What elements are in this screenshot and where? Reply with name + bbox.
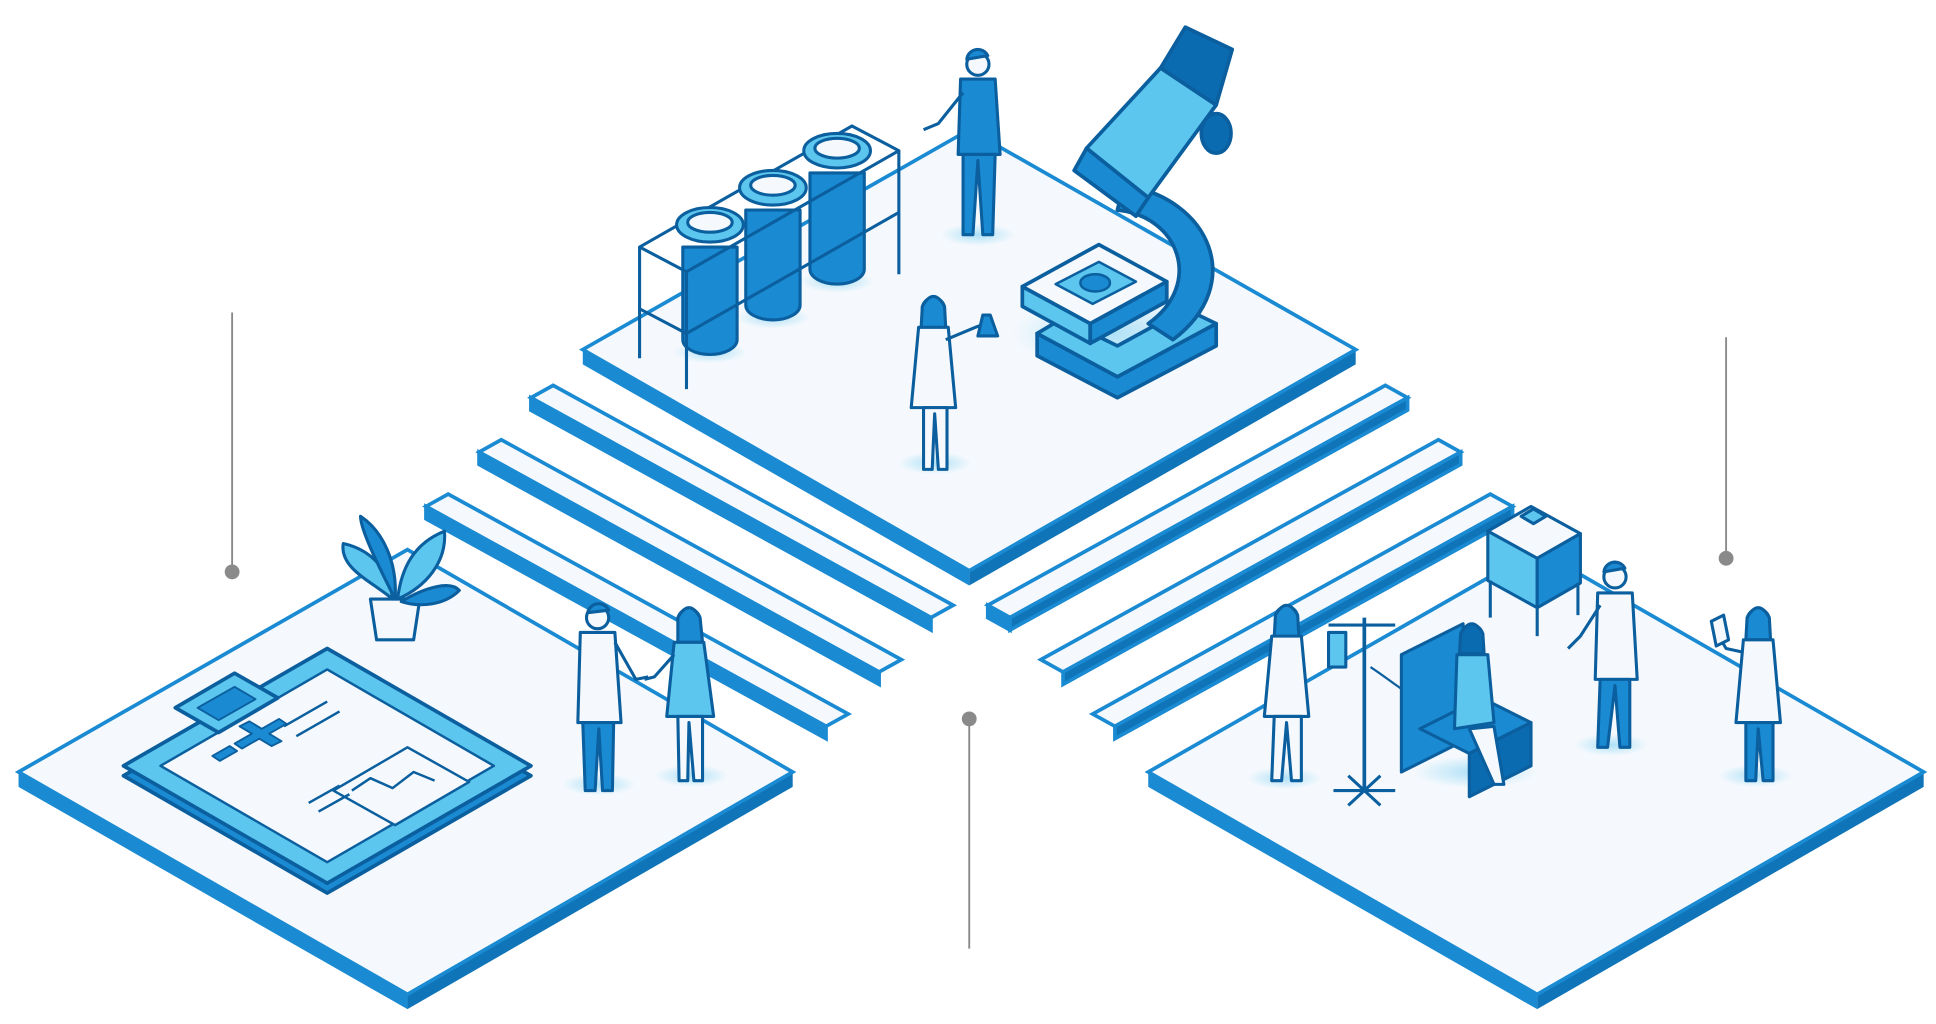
people: lab researcher standing bbox=[924, 49, 1015, 246]
icon: plant bbox=[343, 516, 459, 640]
stripes: left bars bbox=[426, 385, 953, 739]
icon: treatment chair with patient bbox=[1401, 624, 1537, 797]
platform: left (clinic) bbox=[19, 550, 793, 1009]
people: lab researcher with flask bbox=[898, 296, 998, 474]
people: doctor bbox=[1568, 562, 1648, 756]
people: handshake bbox=[562, 604, 728, 795]
platform: top (research) bbox=[583, 130, 1356, 585]
people: nurse with IV bbox=[1247, 605, 1457, 805]
icon: clipboard bbox=[123, 648, 531, 893]
icon: cart bbox=[1488, 506, 1580, 636]
people: nurse with tablet bbox=[1711, 608, 1793, 787]
icon: microscope bbox=[1012, 27, 1232, 398]
leader line: right bbox=[1719, 337, 1734, 566]
leader line: left bbox=[225, 313, 240, 579]
icon: test tube rack bbox=[640, 126, 899, 389]
platform: right (treatment) bbox=[1148, 550, 1924, 1009]
stripes: right bars bbox=[988, 385, 1512, 739]
leader line: center bbox=[962, 711, 977, 949]
